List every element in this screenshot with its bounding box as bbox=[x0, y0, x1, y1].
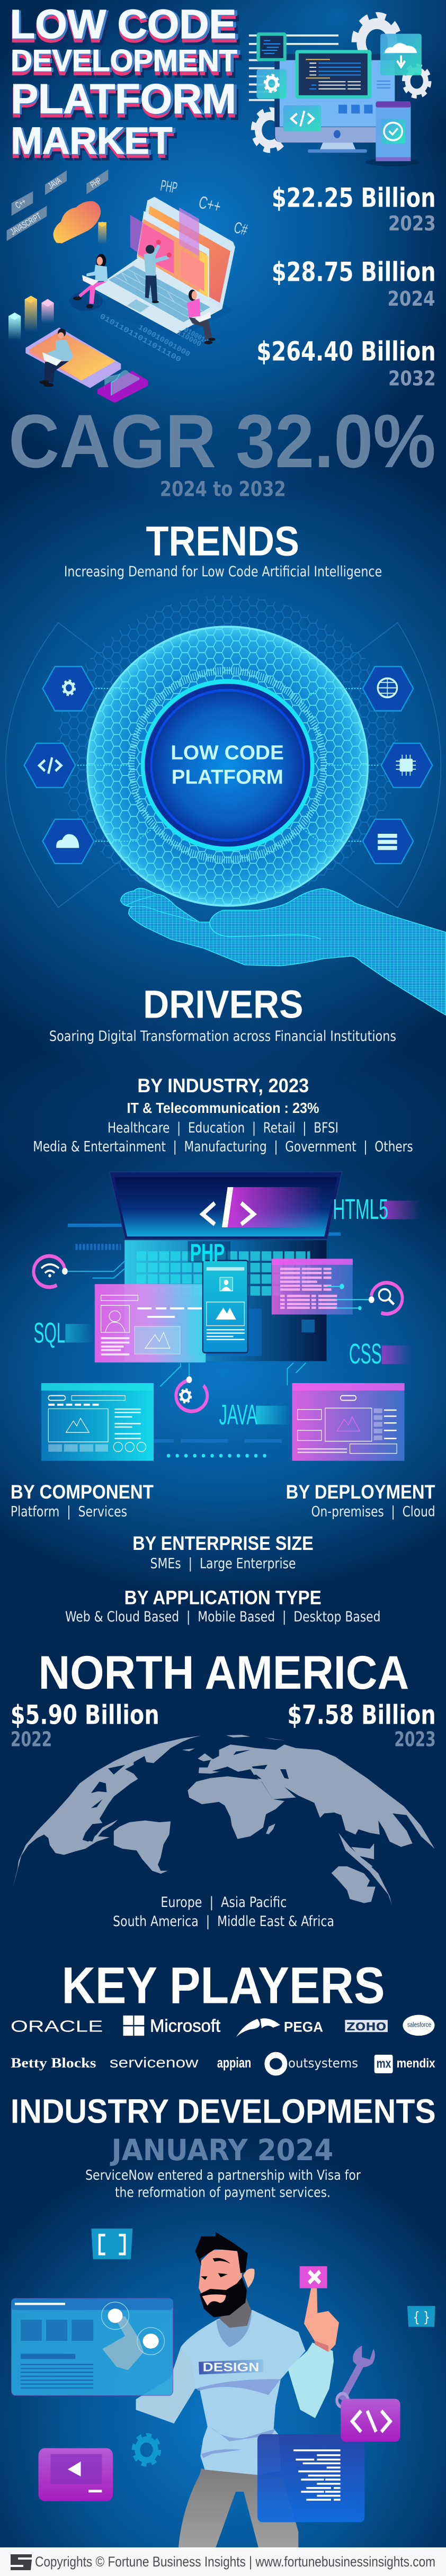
market value 2032: $264.40 Billion bbox=[256, 336, 436, 367]
development description: ServiceNow entered a partnership with Visa for bbox=[85, 2168, 361, 2183]
by application type bbox=[65, 1587, 381, 1625]
laptop deck bbox=[124, 1240, 326, 1361]
wireframe hand bbox=[121, 888, 446, 1015]
other regions: Europe | Asia Pacific bbox=[160, 1894, 287, 1911]
title bbox=[10, 2, 241, 167]
by component: BY COMPONENT bbox=[11, 1482, 154, 1503]
development description bbox=[85, 2168, 361, 2200]
by enterprise size: SMEs | Large Enterprise bbox=[150, 1555, 296, 1572]
binary text bbox=[98, 313, 210, 364]
floating labels: C# bbox=[232, 219, 249, 239]
outer arcs bbox=[6, 622, 441, 907]
logo: outsystems: outsystems bbox=[288, 2056, 358, 2071]
logo: salesforce bbox=[403, 2015, 435, 2036]
code labels: HTML5 bbox=[333, 1193, 388, 1225]
drivers heading bbox=[49, 983, 396, 1044]
value 2022: $5.90 Billion bbox=[11, 1699, 159, 1730]
code window bbox=[295, 50, 371, 99]
logo: betty blocks: Betty Blocks bbox=[11, 2055, 96, 2071]
date: JANUARY 2024 bbox=[110, 2134, 333, 2168]
market value 2023 bbox=[272, 182, 436, 236]
icon: brackets tile bbox=[91, 2229, 132, 2259]
logo: microsoft bbox=[123, 2016, 221, 2036]
gear card bbox=[256, 69, 287, 99]
icon: close button bbox=[300, 2266, 327, 2288]
by industry: Healthcare | Education | Retail | BFSI bbox=[108, 1119, 338, 1136]
value 2022 bbox=[11, 1699, 159, 1751]
icon: play button bbox=[38, 2448, 113, 2501]
by industry: BY INDUSTRY, 2023 bbox=[137, 1075, 309, 1097]
hex icon: globe bbox=[363, 666, 413, 711]
title: PLATFORM bbox=[11, 76, 236, 122]
other regions bbox=[113, 1894, 334, 1929]
binary text: 0100010 bbox=[182, 326, 210, 346]
sweatshirt bbox=[136, 2310, 306, 2475]
by component: Platform | Services bbox=[11, 1503, 127, 1520]
connector lines bbox=[77, 689, 378, 841]
section: regions and players bbox=[11, 1587, 436, 2073]
section: segments bbox=[11, 1075, 435, 1572]
illustration: laptop with web panels bbox=[33, 1172, 421, 1461]
core ring with label bbox=[131, 671, 324, 860]
label bbox=[199, 2359, 263, 2375]
by industry: Media & Entertainment | Manufacturing | Government | Others bbox=[33, 1138, 413, 1155]
raised hand bbox=[304, 2288, 339, 2352]
code labels bbox=[33, 1193, 421, 1431]
market value 2032 bbox=[256, 336, 436, 390]
code card bbox=[256, 32, 287, 61]
title: DEVELOPMENT bbox=[14, 50, 241, 84]
language tags: C++ bbox=[13, 197, 28, 210]
title: PLATFORM bbox=[14, 82, 240, 128]
section: industry developments bbox=[11, 2092, 436, 2501]
bar columns bbox=[8, 296, 54, 340]
developments heading: INDUSTRY DEVELOPMENTS bbox=[11, 2092, 436, 2130]
by industry: IT & Telecommunication : 23% bbox=[127, 1100, 319, 1116]
drivers heading: Soaring Digital Transformation across Financial Institutions bbox=[49, 1028, 396, 1044]
language tags: JAVA bbox=[46, 175, 64, 191]
magenta browser window bbox=[292, 1383, 405, 1461]
icon: wrench bbox=[337, 2346, 375, 2407]
phone bbox=[376, 101, 411, 161]
right pink window bbox=[272, 1259, 371, 1315]
by application type: Web & Cloud Based | Mobile Based | Desktop Based bbox=[65, 1608, 381, 1625]
hex icon: cloud bbox=[43, 819, 94, 863]
by enterprise size bbox=[132, 1533, 314, 1572]
title: DEVELOPMENT bbox=[11, 48, 238, 82]
icon: braces tile bbox=[407, 2306, 435, 2327]
illustration: isometric laptop with developers bbox=[7, 170, 249, 403]
cloud bbox=[53, 201, 106, 244]
logo: appian: appian bbox=[217, 2055, 251, 2071]
title: LOW CODE bbox=[10, 5, 237, 50]
logo: pega: PEGA bbox=[284, 2020, 323, 2035]
by component bbox=[11, 1482, 154, 1520]
character: designer: DESIGN bbox=[203, 2360, 259, 2374]
logo: microsoft: Microsoft bbox=[150, 2016, 221, 2036]
value 2023: $7.58 Billion bbox=[287, 1699, 436, 1730]
code labels: CSS bbox=[349, 1338, 382, 1370]
section: market overview bbox=[8, 2, 436, 501]
person sitting left bbox=[69, 254, 108, 311]
back sphere bbox=[57, 595, 398, 903]
value 2022: 2022 bbox=[11, 1728, 52, 1751]
market value 2032: 2032 bbox=[388, 367, 436, 390]
value 2023: 2023 bbox=[394, 1728, 436, 1751]
logo: servicenow: servicenow bbox=[110, 2055, 199, 2071]
icon: gear bbox=[133, 2435, 159, 2464]
binary text: 01011011011011100 bbox=[98, 313, 182, 364]
by deployment: BY DEPLOYMENT bbox=[286, 1482, 435, 1503]
north america heading: NORTH AMERICA bbox=[38, 1646, 409, 1699]
logo: mendix bbox=[374, 2055, 435, 2073]
language tags: PHP bbox=[88, 175, 103, 190]
floating labels: PHP bbox=[159, 177, 179, 197]
wifi icon bbox=[33, 1256, 124, 1287]
market value 2024: $28.75 Billion bbox=[272, 256, 436, 288]
logo: zoho: ZOHO bbox=[346, 2021, 386, 2033]
by application type: BY APPLICATION TYPE bbox=[124, 1587, 322, 1609]
title: MARKET bbox=[14, 125, 176, 167]
title: MARKET bbox=[11, 123, 174, 165]
title: LOW CODE bbox=[10, 2, 236, 47]
market value 2023: $22.25 Billion bbox=[272, 182, 436, 213]
logo: salesforce: salesforce bbox=[407, 2021, 431, 2029]
person standing bbox=[144, 240, 172, 303]
icon: braces tile: { } bbox=[413, 2308, 430, 2325]
language tags: JAVASCRIPT bbox=[8, 211, 43, 237]
logo: outsystems bbox=[267, 2055, 358, 2073]
panel: touch screen bbox=[11, 2298, 173, 2395]
core ring with label: PLATFORM bbox=[172, 766, 283, 788]
trends heading: TRENDS bbox=[146, 518, 299, 565]
cloud card bbox=[380, 34, 422, 75]
gear icon bbox=[160, 1363, 306, 1411]
title: PLATFORM bbox=[11, 79, 237, 126]
laptop bbox=[76, 197, 235, 339]
by enterprise size: BY ENTERPRISE SIZE bbox=[132, 1533, 314, 1555]
trends heading bbox=[64, 518, 382, 580]
character: designer bbox=[136, 2232, 400, 2548]
other regions: South America | Middle East & Africa bbox=[113, 1913, 334, 1929]
hexagon sphere bbox=[87, 626, 368, 906]
by deployment bbox=[286, 1482, 435, 1520]
cyan browser window bbox=[41, 1383, 154, 1461]
collar bbox=[216, 2312, 252, 2347]
code labels: SQL bbox=[33, 1317, 66, 1349]
hex icon: code bbox=[24, 743, 75, 788]
trousers bbox=[179, 2468, 298, 2548]
search icon bbox=[369, 1283, 403, 1314]
phone with person bbox=[25, 327, 121, 388]
laptop lid bbox=[110, 1172, 342, 1239]
binary text: 110000 bbox=[175, 328, 202, 349]
by deployment: On-premises | Cloud bbox=[311, 1503, 435, 1520]
hex icon: server bbox=[363, 819, 413, 863]
title: MARKET bbox=[13, 120, 175, 163]
development description: the reformation of payment services. bbox=[115, 2185, 331, 2200]
title: DEVELOPMENT bbox=[11, 44, 237, 78]
language tags bbox=[7, 170, 108, 241]
purple chart tile bbox=[97, 370, 148, 403]
key players heading: KEY PLAYERS bbox=[62, 1957, 385, 2015]
code labels: PHP bbox=[190, 1240, 225, 1267]
footer bbox=[0, 2547, 446, 2576]
logo: oracle: ORACLE bbox=[11, 2017, 103, 2035]
illustration: desktop monitor with code panels bbox=[249, 16, 430, 166]
title: DEVELOPMENT bbox=[13, 44, 240, 78]
hex icon: gear bbox=[43, 666, 94, 711]
binary text: 100010001000 bbox=[137, 323, 192, 359]
left pink window bbox=[95, 1284, 206, 1362]
logo: pega bbox=[236, 2018, 323, 2037]
trends heading: Increasing Demand for Low Code Artificial Intelligence bbox=[64, 563, 382, 580]
title: LOW CODE bbox=[13, 7, 240, 52]
code tag card bbox=[283, 105, 321, 131]
panel: code document bbox=[257, 2434, 364, 2522]
logo: zoho bbox=[345, 2020, 388, 2033]
logo: mendix: mendix bbox=[397, 2056, 435, 2071]
market value 2024: 2024 bbox=[387, 288, 435, 311]
phone bbox=[203, 1260, 248, 1353]
dotted row bbox=[168, 1453, 273, 1459]
world map bbox=[13, 1735, 435, 1905]
icon: code button bbox=[341, 2399, 400, 2441]
person sitting right bbox=[187, 290, 216, 344]
title: LOW CODE bbox=[12, 2, 239, 48]
floating labels: C++ bbox=[197, 193, 223, 217]
drivers heading: DRIVERS bbox=[143, 983, 303, 1027]
market value 2024 bbox=[272, 256, 436, 311]
floating labels bbox=[159, 177, 249, 239]
value 2023 bbox=[287, 1699, 436, 1751]
by industry bbox=[33, 1075, 413, 1155]
hex icon: chip bbox=[381, 743, 432, 788]
title: PLATFORM bbox=[13, 77, 239, 123]
logo bbox=[11, 2554, 32, 2570]
section: trends bbox=[6, 518, 441, 1044]
cagr: 2024 to 2032 bbox=[160, 477, 286, 501]
code labels: JAVA bbox=[219, 1399, 257, 1431]
logo: mendix: mx bbox=[376, 2056, 391, 2071]
title: MARKET bbox=[11, 119, 172, 162]
head bbox=[199, 2249, 242, 2309]
market value 2023: 2023 bbox=[388, 212, 436, 236]
core ring with label: LOW CODE bbox=[171, 742, 284, 764]
cagr: CAGR 32.0% bbox=[8, 398, 436, 483]
